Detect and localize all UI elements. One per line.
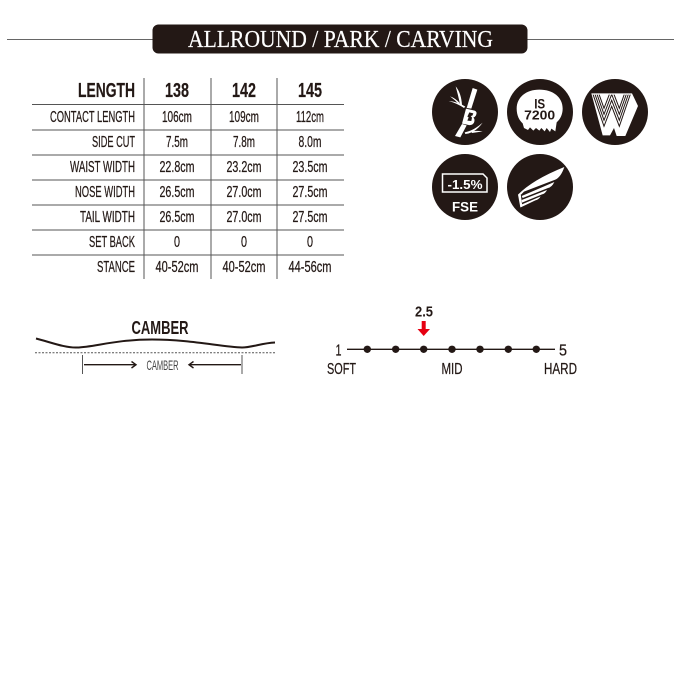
spec table: 27.0cm (226, 209, 262, 226)
spec table: 27.0cm (226, 184, 262, 201)
spec table: 23.5cm (292, 159, 328, 176)
icon: bamboo (432, 79, 498, 145)
icon: wing (507, 154, 573, 220)
flex scale: SOFT (327, 361, 356, 378)
camber profile diagram: CAMBER (146, 357, 178, 373)
flex scale: 5 (559, 342, 567, 360)
spec table: TAIL WIDTH (80, 209, 135, 226)
icon: FSE -1.5%: -1.5% (448, 177, 483, 192)
spec table: 40-52cm (156, 259, 198, 276)
icon: W logo (582, 79, 648, 145)
spec table: 7.8m (233, 134, 255, 151)
spec table: WAIST WIDTH (70, 159, 135, 176)
spec table (32, 78, 344, 279)
icon: FSE -1.5% (432, 154, 498, 220)
spec table: 145 (298, 80, 322, 102)
spec table: 0 (241, 234, 247, 251)
icon: IS 7200 skull: 7200 (524, 108, 555, 123)
spec table: 106cm (162, 109, 192, 126)
icon: IS 7200 skull: IS (534, 96, 545, 112)
spec table: 27.5cm (292, 209, 328, 226)
flex scale: MID (442, 361, 462, 378)
spec table: 23.2cm (226, 159, 262, 176)
spec table: 138 (165, 80, 189, 102)
flex scale: HARD (544, 361, 577, 378)
spec table: SIDE CUT (92, 134, 135, 151)
spec table: CONTACT LENGTH (50, 109, 135, 126)
icon: IS 7200 skull (507, 79, 573, 145)
spec table: 44-56cm (288, 259, 332, 276)
spec table: 142 (232, 80, 256, 102)
spec table: 40-52cm (222, 259, 266, 276)
spec table: LENGTH (78, 80, 135, 102)
spec table: NOSE WIDTH (75, 184, 135, 201)
spec table: 26.5cm (160, 209, 194, 226)
title banner: ALLROUND / PARK / CARVING (188, 27, 493, 53)
spec table: SET BACK (89, 234, 135, 251)
spec table: STANCE (97, 259, 135, 276)
camber profile diagram: CAMBER (132, 318, 188, 338)
spec table: 0 (307, 234, 313, 251)
spec table: 27.5cm (292, 184, 328, 201)
icon: FSE -1.5%: FSE (452, 198, 478, 214)
spec table: 8.0m (298, 134, 322, 151)
spec table: 109cm (229, 109, 259, 126)
spec table: 22.8cm (160, 159, 194, 176)
flex scale (327, 304, 577, 378)
spec table: 26.5cm (160, 184, 194, 201)
camber profile diagram (35, 318, 275, 374)
flex scale: 2.5 (415, 304, 433, 321)
spec table: 112cm (296, 109, 324, 126)
spec table: 7.5m (166, 134, 188, 151)
flex scale: 1 (336, 342, 342, 360)
spec table: 0 (174, 234, 180, 251)
